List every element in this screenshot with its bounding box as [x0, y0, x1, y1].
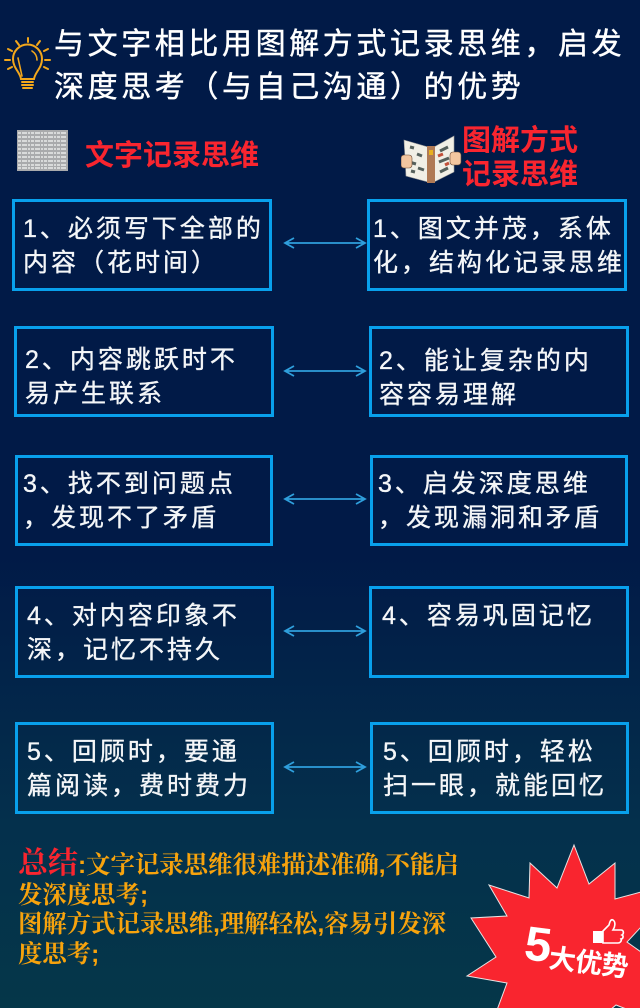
panel: left 1 [12, 199, 272, 291]
badge label: 5 [522, 917, 555, 973]
badge: five advantages starburst [466, 844, 640, 1008]
panel: left 5: 5、回顾时，要通 [27, 738, 240, 766]
panel: right 5: 5、回顾时，轻松 [383, 738, 596, 766]
panel: left 1: 1、必须写下全部的 [23, 215, 264, 243]
arrow 3 [283, 493, 367, 505]
badge label: 大优势 [547, 943, 630, 983]
summary text [18, 847, 459, 968]
panel: right 5: 扫一眼，就能回忆 [383, 772, 607, 800]
panel: right 1: 化，结构化记录思维 [373, 249, 625, 277]
panel: left 1: 内容（花时间） [23, 249, 219, 277]
icon: thumbs up [593, 920, 623, 943]
arrow 4 [283, 625, 367, 637]
title: 与文字相比用图解方式记录思维，启发 [54, 28, 625, 61]
panel: right 4 [369, 586, 629, 678]
heading: diagram recording [462, 124, 578, 191]
title [54, 28, 625, 104]
arrow 2 [283, 365, 367, 377]
arrow 5 [283, 761, 367, 773]
summary text: 总结:文字记录思维很难描述准确,不能启 [18, 847, 459, 880]
panel: left 4: 4、对内容印象不 [27, 602, 240, 630]
heading: diagram recording: 图解方式 [462, 125, 578, 157]
heading: diagram recording: 记录思维 [462, 159, 578, 191]
heading: text recording: 文字记录思维 [85, 140, 259, 172]
arrow 1 [283, 237, 367, 249]
panel: right 2: 2、能让复杂的内 [379, 347, 592, 375]
panel: right 2: 容容易理解 [379, 381, 519, 409]
icon: open illustrated book [401, 136, 462, 183]
panel: right 4: 4、容易巩固记忆 [382, 602, 595, 630]
panel: left 5: 篇阅读，费时费力 [27, 772, 251, 800]
panel: left 4 [15, 586, 274, 678]
panel: right 1 [367, 199, 627, 291]
panel: left 3 [15, 455, 273, 546]
summary text: 图解方式记录思维,理解轻松,容易引发深 [18, 911, 446, 938]
panel: left 5 [15, 722, 274, 814]
panel: right 3 [370, 455, 628, 546]
panel: left 3: 3、找不到问题点 [23, 470, 236, 498]
panel: left 2: 2、内容跳跃时不 [25, 346, 238, 374]
icon: light bulb [4, 37, 51, 89]
panel: right 1: 1、图文并茂，系体 [373, 215, 614, 243]
panel: right 3: 3、启发深度思维 [378, 470, 591, 498]
panel: left 3: ，发现不了矛盾 [23, 504, 219, 532]
title: 深度思考（与自己沟通）的优势 [54, 71, 524, 104]
panel: right 5 [370, 722, 629, 814]
panel: left 2: 易产生联系 [25, 380, 165, 408]
panel: left 2 [14, 326, 274, 417]
panel: left 4: 深，记忆不持久 [27, 636, 223, 664]
icon: text page thumbnail [17, 130, 68, 171]
panel: right 3: ，发现漏洞和矛盾 [378, 504, 602, 532]
panel: right 2 [369, 326, 629, 417]
summary text: 发深度思考; [18, 882, 148, 909]
summary text: 度思考; [18, 941, 99, 968]
